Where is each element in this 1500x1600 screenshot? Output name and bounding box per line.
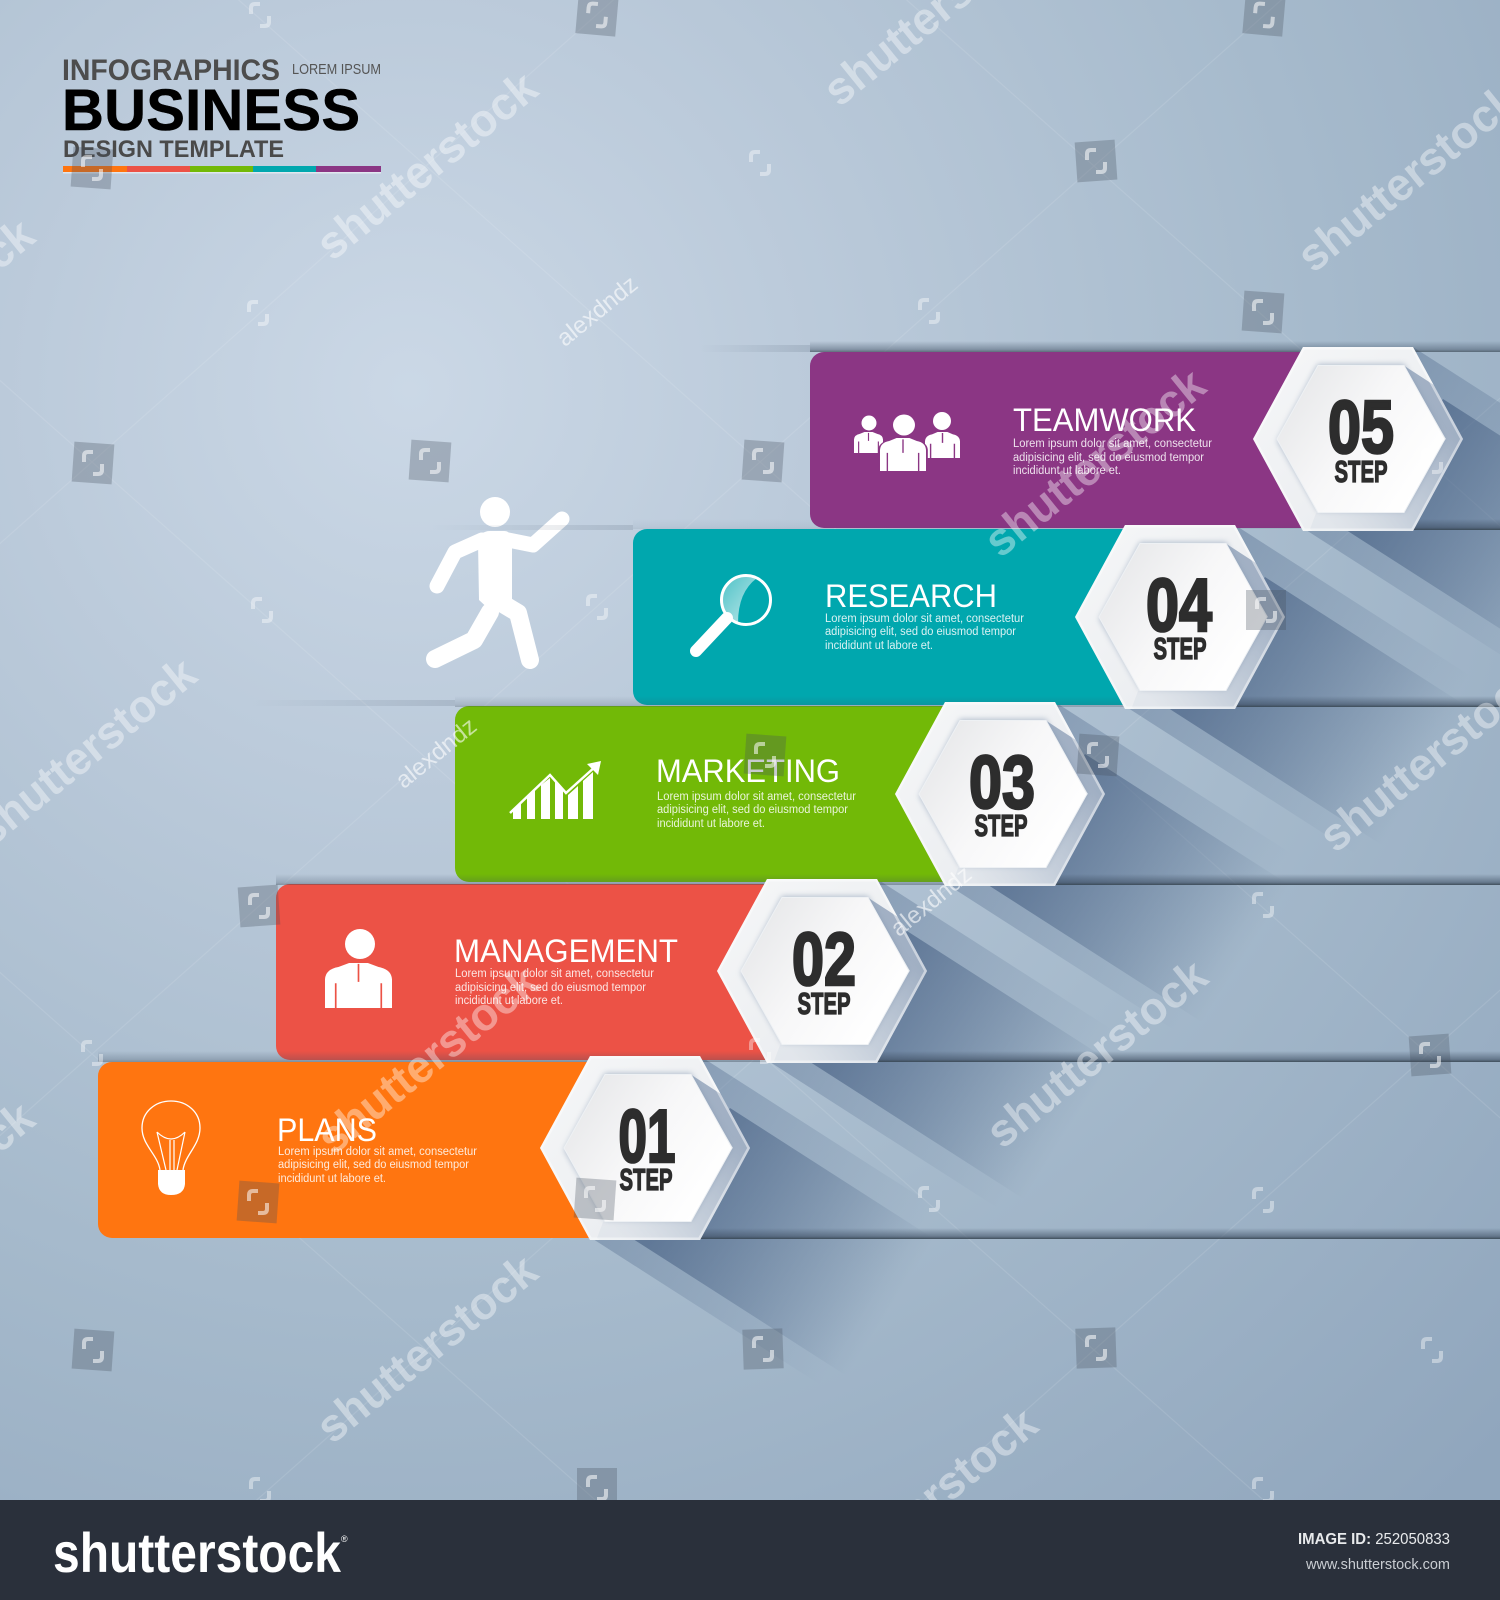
image id: IMAGE ID: 252050833	[1298, 1531, 1450, 1548]
step label: STEP	[798, 986, 850, 1021]
hexagon badge: step 03	[895, 702, 1105, 886]
text block	[825, 613, 1024, 652]
text block: incididunt ut labore et.	[278, 1173, 386, 1185]
heading: infographics: INFOGRAPHICS	[62, 54, 280, 87]
colour rule	[63, 166, 381, 174]
text block: Lorem ipsum dolor sit amet, consectetur	[1013, 438, 1212, 450]
step number: 05	[1328, 385, 1394, 469]
icon: manager	[325, 929, 392, 1008]
step label: STEP	[620, 1162, 672, 1197]
watermark: stock marks: shutterstock	[306, 60, 547, 270]
watermark: stock marks: shutterstock	[307, 954, 548, 1164]
text block: Lorem ipsum dolor sit amet, consectetur	[657, 791, 856, 803]
icon: team	[854, 412, 960, 471]
step number: 01	[618, 1094, 676, 1178]
step number: 02	[792, 917, 856, 1001]
text block: incididunt ut labore et.	[657, 818, 765, 830]
footer bar	[0, 1500, 1500, 1600]
text block: adipisicing elit, sed do eiusmod tempor	[657, 804, 848, 816]
step label: STEP	[1154, 631, 1206, 666]
hexagon badge: step 04	[1075, 525, 1285, 709]
hexagon badge: step 05	[1253, 347, 1463, 531]
icon: running figure	[435, 497, 562, 660]
step number: 04	[1146, 563, 1212, 647]
text block	[455, 968, 654, 1007]
icon: growth chart	[510, 761, 601, 819]
step number: 03	[969, 740, 1035, 824]
text block: incididunt ut labore et.	[1013, 465, 1121, 477]
text block: adipisicing elit, sed do eiusmod tempor	[1013, 452, 1204, 464]
heading: marketing: MARKETING	[656, 753, 840, 789]
text block	[657, 791, 856, 830]
text block: Lorem ipsum dolor sit amet, consectetur	[455, 968, 654, 980]
heading: design template: DESIGN TEMPLATE	[63, 136, 284, 163]
panel: step 05 teamwork	[810, 352, 1370, 528]
watermark: stock marks: shutterstock	[306, 1243, 547, 1453]
text block: adipisicing elit, sed do eiusmod tempor	[455, 982, 646, 994]
watermark: stock marks: alexdndz	[885, 861, 977, 942]
text block: incididunt ut labore et.	[455, 995, 563, 1007]
icon: light bulb	[142, 1101, 200, 1195]
registered mark: ®	[341, 1534, 348, 1544]
step label: STEP	[975, 808, 1027, 843]
heading: plans: PLANS	[277, 1112, 377, 1148]
text block: adipisicing elit, sed do eiusmod tempor	[825, 626, 1016, 638]
heading: business: BUSINESS	[62, 78, 360, 143]
watermark: stock marks: shutterstock	[976, 948, 1217, 1158]
text block: Lorem ipsum dolor sit amet, consectetur	[825, 613, 1024, 625]
step label: STEP	[1335, 454, 1387, 489]
watermark: stock marks: shutterstock	[806, 1396, 1047, 1600]
panel: step 04 research	[633, 529, 1193, 705]
text block: adipisicing elit, sed do eiusmod tempor	[278, 1159, 469, 1171]
panel: step 02 management	[276, 884, 836, 1060]
header: title block	[62, 54, 381, 174]
heading: lorem ipsum: LOREM IPSUM	[292, 61, 381, 78]
panel: step 01 plans	[98, 1062, 658, 1238]
heading: teamwork: TEAMWORK	[1013, 402, 1196, 438]
watermark: stock marks: shutterstock	[974, 357, 1215, 567]
text block: incididunt ut labore et.	[825, 640, 933, 652]
watermark: stock marks: alexdndz	[551, 271, 643, 352]
icon: magnifying glass	[696, 576, 770, 651]
hexagon badge: step 01	[540, 1056, 750, 1240]
long shadows of the hexagons	[593, 347, 1500, 1457]
watermark: stock marks: alexdndz	[390, 713, 482, 794]
footer logo: shutterstock	[53, 1521, 342, 1584]
panel: step 03 marketing	[455, 706, 1015, 882]
text block: Lorem ipsum dolor sit amet, consectetur	[278, 1146, 477, 1158]
heading: management: MANAGEMENT	[454, 933, 678, 969]
hexagon badge: step 02	[717, 879, 927, 1063]
heading: research: RESEARCH	[825, 578, 997, 614]
website: www.shutterstock.com	[1305, 1556, 1450, 1573]
text block	[278, 1146, 477, 1185]
text block	[1013, 438, 1212, 477]
